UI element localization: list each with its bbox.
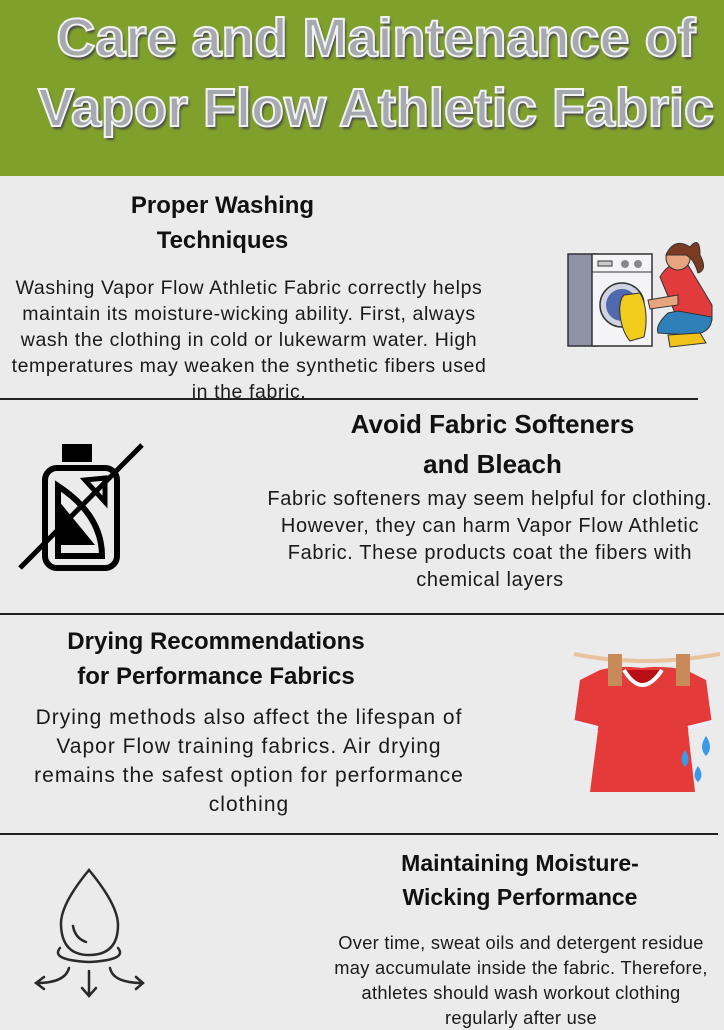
section 3 heading (67, 628, 365, 690)
section 1 heading (131, 192, 314, 254)
section 1 text: maintain its moisture-wicking ability. First, always (22, 303, 476, 325)
section 3 text: clothing (209, 793, 289, 816)
section 4 heading: Wicking Performance (402, 884, 637, 910)
title: Care and Maintenance of (56, 8, 696, 68)
section 1 heading: Proper Washing (131, 192, 314, 219)
section 2 heading (351, 409, 634, 479)
section 2 text: Fabric softeners may seem helpful for clothing. (267, 488, 713, 510)
icon: shirt on clothesline (574, 652, 720, 792)
section 2 text: Fabric. These products coat the fibers with (288, 542, 692, 564)
section 4 heading: Maintaining Moisture- (401, 850, 639, 876)
section 1 text: temperatures may weaken the synthetic fibers used (12, 355, 486, 377)
section 2 text (267, 488, 713, 591)
section 2 text: chemical layers (416, 569, 564, 591)
divider (0, 398, 698, 400)
section 2 heading: Avoid Fabric Softeners (351, 409, 634, 439)
divider (0, 613, 724, 615)
header banner (0, 0, 724, 176)
section 4 text: regularly after use (445, 1007, 597, 1028)
section 3 heading: Drying Recommendations (67, 628, 365, 655)
section 4 text: may accumulate inside the fabric. Therefore, (334, 957, 708, 978)
section 1 text: wash the clothing in cold or lukewarm water. High (21, 329, 477, 351)
section 3 text (34, 706, 464, 816)
section 2 text: However, they can harm Vapor Flow Athletic (281, 515, 699, 537)
section 1 heading: Techniques (157, 227, 288, 254)
section 4 heading (401, 850, 639, 910)
title: Vapor Flow Athletic Fabric (38, 78, 714, 138)
section 4 text: Over time, sweat oils and detergent residue (338, 932, 704, 953)
section 1 text (12, 277, 486, 403)
icon: water drop wicking (34, 868, 145, 998)
section 4 text: athletes should wash workout clothing (361, 982, 680, 1003)
section 2 heading: and Bleach (423, 449, 562, 479)
section 3 text: remains the safest option for performance (34, 764, 464, 787)
icon: woman at washing machine (567, 242, 712, 348)
section 1 text: Washing Vapor Flow Athletic Fabric correctly helps (16, 277, 482, 299)
section 4 text (334, 932, 708, 1028)
icon: no fabric softener bottle (18, 443, 144, 571)
section 3 text: Drying methods also affect the lifespan of (36, 706, 462, 729)
section 3 text: Vapor Flow training fabrics. Air drying (56, 735, 442, 758)
divider (0, 833, 718, 835)
section 1 text: in the fabric. (192, 381, 306, 403)
title (37, 8, 716, 142)
section 3 heading: for Performance Fabrics (77, 663, 355, 690)
